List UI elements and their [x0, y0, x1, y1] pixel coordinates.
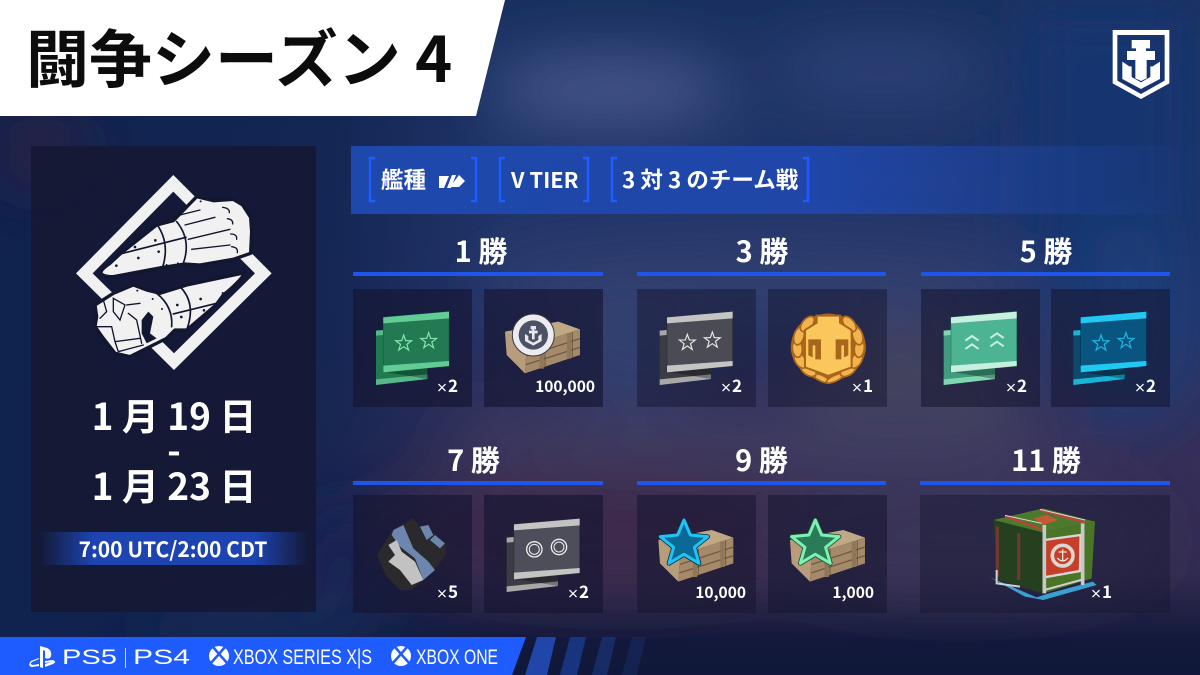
- tier label: V TIER: [510, 164, 579, 195]
- Xbox Series logo: [209, 646, 372, 669]
- reward: green star crate 1,000: 1,000: [832, 581, 874, 603]
- date range: -: [167, 421, 181, 475]
- reward: credits crate 100,000: 100,000: [535, 375, 595, 397]
- reward group: 7 wins: [353, 438, 603, 613]
- date range: [92, 387, 256, 511]
- reward: blue star signal x2: ×2: [1134, 372, 1156, 397]
- reward group: 5 wins: 5 勝: [1020, 229, 1072, 271]
- reward: teal chevron signal x2: ×2: [1005, 372, 1027, 397]
- Xbox One logo: [391, 646, 498, 669]
- PlayStation logos: [29, 646, 190, 669]
- reward: green star signal x2: ×2: [436, 372, 458, 397]
- reward: blue star signal x2: [1051, 289, 1170, 407]
- PlayStation logos: PS5: [62, 646, 117, 669]
- reward: grey coin signal x2: [484, 495, 603, 613]
- title banner: [0, 0, 505, 116]
- PlayStation logos: PS4: [133, 646, 190, 669]
- ship type label: [381, 163, 465, 195]
- reward group: 9 wins: 9 勝: [735, 438, 788, 480]
- reward: blue star crate 10,000: 10,000: [695, 581, 746, 603]
- reward group: 3 wins: 3 勝: [736, 229, 788, 271]
- time band: 7:00 UTC/2:00 CDT: [79, 534, 267, 564]
- logo: anchor shield: [1113, 30, 1169, 99]
- icon: armoured fists in diamond: [76, 175, 272, 370]
- reward: teal chevron signal x2: [921, 289, 1040, 407]
- reward: gold laurel emblem x1: ×1: [851, 372, 873, 397]
- date range: 1 月 23 日: [92, 457, 256, 511]
- reward group: 11 wins: 11 勝: [1011, 438, 1081, 480]
- reward: grey coin signal x2: ×2: [567, 578, 589, 603]
- reward: green star signal x2: [353, 289, 472, 407]
- reward: green star crate 1,000: [768, 495, 887, 613]
- Xbox One logo: XBOX ONE: [416, 646, 498, 669]
- team battle label: 3 対 3 のチーム戦: [622, 163, 799, 195]
- reward group: 11 wins: [920, 438, 1170, 613]
- reward: military supply crate x1: ×1: [1090, 578, 1112, 603]
- Xbox Series logo: XBOX SERIES X|S: [233, 646, 372, 669]
- platform footer: [0, 637, 646, 675]
- reward: gold laurel emblem x1: [768, 289, 887, 407]
- reward group: 5 wins: [921, 229, 1170, 407]
- reward: grey star signal x2: [637, 289, 756, 407]
- reward group: 1 win: [353, 229, 603, 407]
- battle rules bar: [351, 146, 1200, 214]
- reward: camouflage x5: [353, 495, 472, 613]
- reward group: 1 win: 1 勝: [455, 229, 507, 271]
- ship type label: 艦種: [381, 163, 426, 195]
- reward: camouflage x5: ×5: [436, 578, 458, 603]
- reward: military supply crate x1: [920, 495, 1170, 613]
- reward: credits crate 100,000: [484, 289, 603, 407]
- title banner: 闘争シーズン 4: [26, 10, 452, 101]
- reward group: 3 wins: [637, 229, 887, 407]
- reward: grey star signal x2: ×2: [720, 372, 742, 397]
- reward group: 7 wins: 7 勝: [447, 438, 500, 480]
- date range: 1 月 19 日: [92, 387, 256, 441]
- time band: [40, 532, 308, 565]
- reward: blue star crate 10,000: [637, 495, 756, 613]
- reward group: 9 wins: [637, 438, 887, 613]
- panel: season dates: [31, 146, 316, 612]
